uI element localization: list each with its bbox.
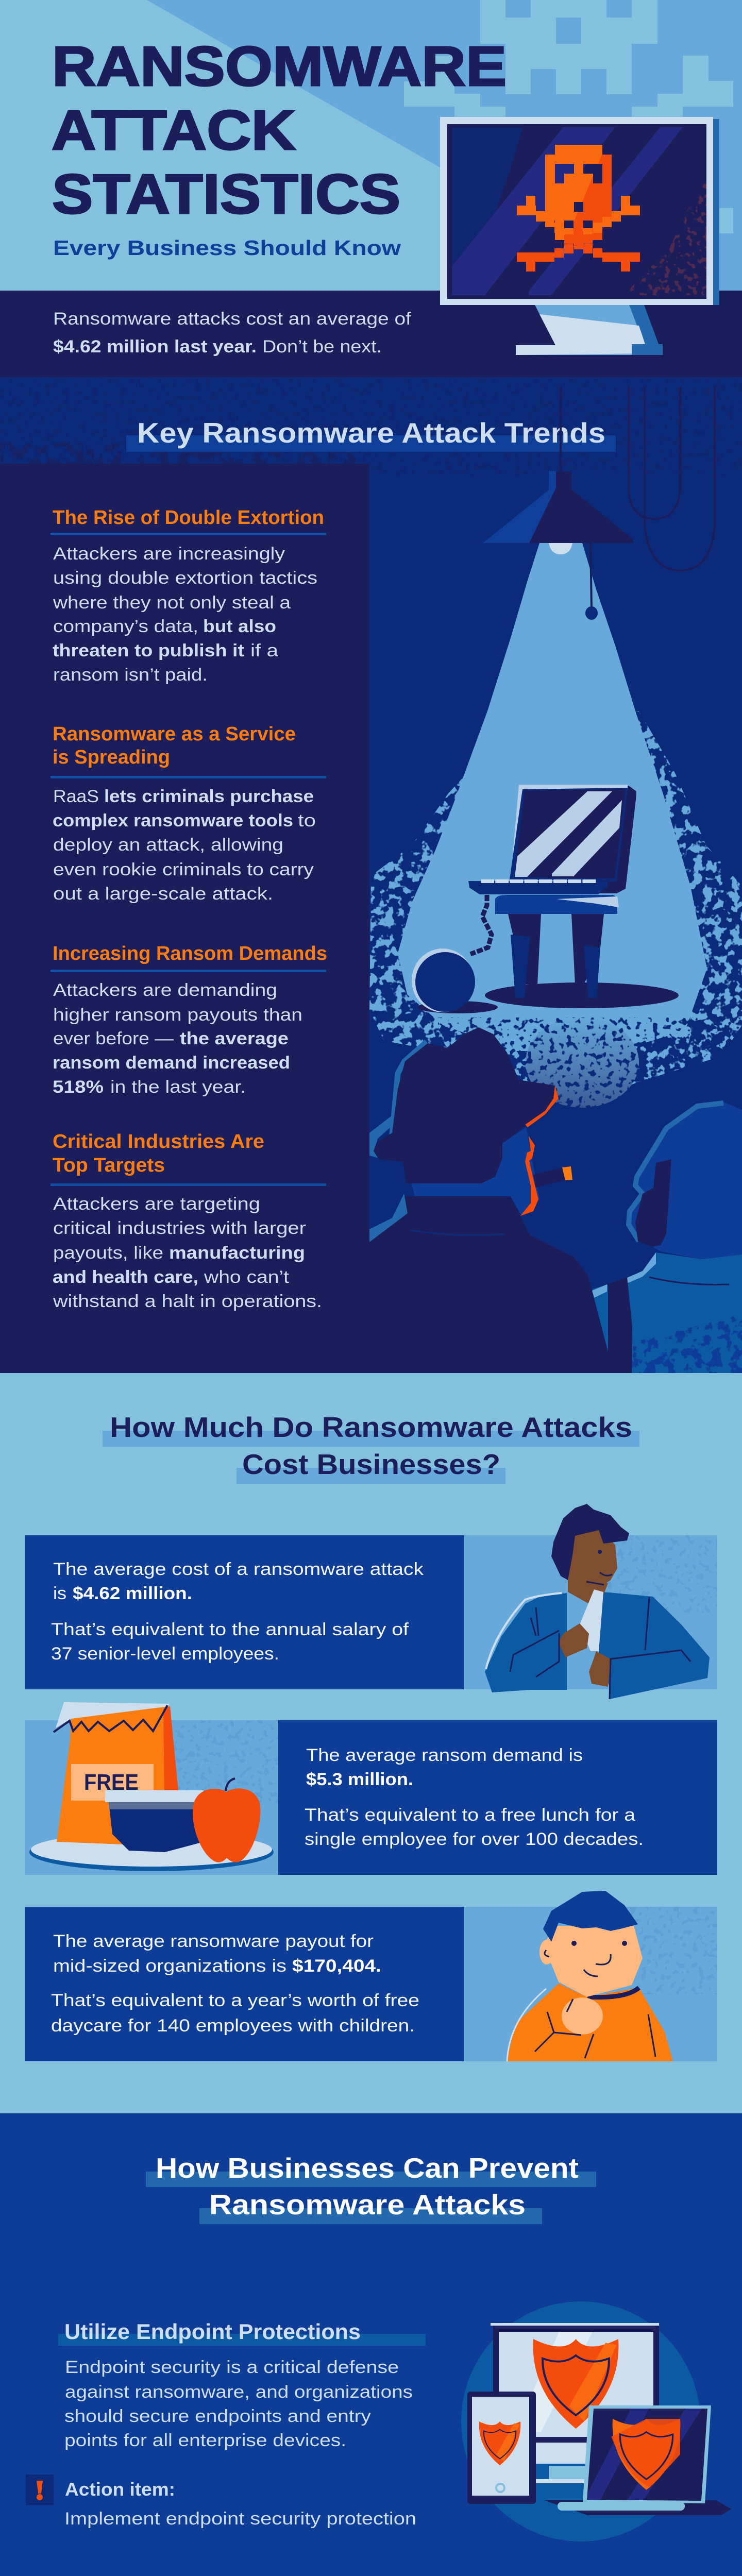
block: endpoint protections: Action item: bbox=[65, 2479, 175, 2500]
heading: prevention: How Businesses Can Prevent bbox=[156, 2152, 579, 2184]
title: STATISTICS bbox=[52, 163, 400, 226]
panel: how businesses can prevent attacks bbox=[0, 2113, 742, 2576]
heading: prevention bbox=[146, 2152, 596, 2224]
text block: ransomware as a service: out a large-scale attack. bbox=[53, 884, 273, 904]
text block: critical industries: withstand a halt in operations. bbox=[53, 1292, 322, 1311]
text block: rise of double extortion: where they not only steal a bbox=[53, 593, 291, 613]
block: endpoint protections: points for all enterprise devices. bbox=[64, 2431, 346, 2450]
text block: rise of double extortion bbox=[50, 507, 326, 685]
text block: critical industries: and health care, bbox=[53, 1267, 198, 1287]
text block: hero intro: Ransomware attacks cost an average of bbox=[53, 309, 412, 329]
block: endpoint protections: should secure endpoints and entry bbox=[64, 2406, 371, 2426]
text block: critical industries: who can’t bbox=[204, 1267, 290, 1287]
text block: ransomware as a service: even rookie criminals to carry bbox=[53, 860, 314, 879]
text block: critical industries: manufacturing bbox=[169, 1243, 305, 1263]
heading: how much do attacks cost: How Much Do Ransomware Attacks bbox=[110, 1411, 632, 1443]
text block: ransomware as a service: is Spreading bbox=[53, 747, 170, 768]
panel: hero header bbox=[0, 0, 742, 378]
text block: ransomware as a service: lets criminals purchase bbox=[104, 787, 314, 806]
text block: increasing ransom demands: 518% bbox=[53, 1077, 104, 1097]
block: endpoint protections: Endpoint security is a critical defense bbox=[65, 2358, 399, 2377]
text block: rise of double extortion: The Rise of Double Extortion bbox=[53, 507, 324, 529]
icon: background pixel skull bbox=[404, 0, 733, 233]
block: endpoint protections: Utilize Endpoint Protections bbox=[64, 2319, 361, 2344]
icon: phone shield bbox=[479, 2421, 520, 2465]
title: RANSOMWARE bbox=[52, 35, 507, 98]
panel: cost of ransomware attacks bbox=[0, 1373, 742, 2114]
text block: increasing ransom demands: ransom demand increased bbox=[53, 1053, 290, 1073]
card: average cost of attack: is bbox=[53, 1584, 66, 1603]
icon: free lunch bag, bowl and apple: FREE bbox=[84, 1770, 139, 1795]
illustration: shielded devices bbox=[461, 2301, 731, 2541]
text block: critical industries: Critical Industries Are bbox=[53, 1131, 264, 1153]
card: average cost of attack: $4.62 million. bbox=[73, 1584, 192, 1603]
icon: exclamation alert bbox=[26, 2475, 54, 2505]
card: average cost of attack bbox=[25, 1504, 717, 1699]
icon: smiling person in orange sweater bbox=[507, 1891, 673, 2061]
subtitle: Every Business Should Know bbox=[53, 236, 401, 260]
icon: man in a suit bbox=[485, 1504, 710, 1699]
heading: key trends: Key Ransomware Attack Trends bbox=[137, 417, 605, 449]
card: average payout for mid-sized organizations: $170,404. bbox=[292, 1956, 381, 1976]
icon: laptop shield bbox=[611, 2419, 680, 2490]
heading: how much do attacks cost: Cost Businesses? bbox=[242, 1448, 500, 1480]
text block: ransomware as a service bbox=[50, 723, 326, 904]
card: average payout for mid-sized organizations: daycare for 140 employees with children. bbox=[51, 2016, 415, 2036]
illustration: locked laptop on table with ball and chain bbox=[412, 785, 679, 1013]
text block: increasing ransom demands bbox=[50, 943, 327, 1097]
block: endpoint protections: against ransomware, and organizations bbox=[65, 2382, 413, 2402]
text block: increasing ransom demands: Increasing Ransom Demands bbox=[53, 943, 327, 964]
text block: ransomware as a service: Ransomware as a Service bbox=[53, 723, 296, 745]
text block: critical industries: Attackers are targeting bbox=[53, 1194, 260, 1214]
text block: rise of double extortion: if a bbox=[250, 641, 278, 660]
text block: increasing ransom demands: the average bbox=[180, 1029, 289, 1048]
card: average ransom demand: $5.3 million. bbox=[306, 1770, 413, 1789]
heading: how much do attacks cost bbox=[103, 1411, 639, 1484]
title: ATTACK bbox=[52, 99, 296, 162]
card: average ransom demand: single employee for over 100 decades. bbox=[305, 1829, 644, 1849]
text block: critical industries bbox=[50, 1131, 326, 1311]
card: average cost of attack: The average cost of a ransomware attack bbox=[53, 1560, 424, 1579]
icon: monitor shield bbox=[533, 2339, 618, 2429]
text block: hero intro: $4.62 million last year. bbox=[53, 337, 257, 357]
card: average payout for mid-sized organizations: The average ransomware payout for bbox=[53, 1931, 374, 1951]
card: average ransom demand: That’s equivalent to a free lunch for a bbox=[305, 1805, 635, 1825]
illustration: hanging lamp and light cone bbox=[369, 386, 742, 1103]
card: average payout for mid-sized organizations bbox=[25, 1891, 717, 2061]
text block: critical industries: payouts, like bbox=[53, 1243, 163, 1263]
card: average ransom demand bbox=[25, 1702, 717, 1875]
text block: rise of double extortion: using double extortion tactics bbox=[53, 568, 317, 588]
icon: free lunch bag, bowl and apple bbox=[29, 1702, 274, 1871]
text block: critical industries: critical industries with larger bbox=[53, 1218, 306, 1238]
card: average payout for mid-sized organizations: That’s equivalent to a year’s worth of free bbox=[51, 1991, 419, 2010]
text block: ransomware as a service: complex ransomware tools bbox=[53, 811, 293, 831]
block: endpoint protections: Implement endpoint security protection bbox=[64, 2509, 416, 2529]
text block: hero intro: Don’t be next. bbox=[262, 337, 382, 357]
text block: rise of double extortion: company’s data, bbox=[53, 617, 198, 636]
text block: rise of double extortion: but also bbox=[203, 617, 276, 636]
illustration: two hacker silhouettes bbox=[369, 1017, 742, 1374]
text block: ransomware as a service: to bbox=[298, 811, 316, 831]
card: average payout for mid-sized organizations: mid-sized organizations is bbox=[53, 1956, 286, 1976]
text block: rise of double extortion: Attackers are increasingly bbox=[53, 544, 285, 564]
panel: key ransomware attack trends bbox=[0, 377, 742, 1374]
text block: critical industries: Top Targets bbox=[53, 1155, 165, 1176]
text block: rise of double extortion: ransom isn’t paid. bbox=[53, 665, 208, 685]
text block: increasing ransom demands: in the last year. bbox=[110, 1077, 246, 1097]
block: endpoint protections bbox=[26, 2319, 426, 2529]
text block: increasing ransom demands: ever before — bbox=[53, 1029, 174, 1048]
title bbox=[52, 35, 507, 226]
text block: increasing ransom demands: Attackers are demanding bbox=[53, 980, 277, 1000]
text block: hero intro bbox=[53, 309, 412, 357]
icon: monitor with skull and crossbones bbox=[440, 117, 719, 355]
text block: rise of double extortion: threaten to publish it bbox=[53, 641, 244, 660]
text block: ransomware as a service: RaaS bbox=[53, 787, 99, 806]
text block: ransomware as a service: deploy an attack, allowing bbox=[53, 835, 283, 855]
card: average cost of attack: 37 senior-level employees. bbox=[51, 1644, 279, 1664]
card: average ransom demand: The average ransom demand is bbox=[306, 1745, 583, 1765]
heading: prevention: Ransomware Attacks bbox=[209, 2189, 526, 2221]
card: average cost of attack: That’s equivalent to the annual salary of bbox=[51, 1620, 409, 1639]
text block: increasing ransom demands: higher ransom payouts than bbox=[53, 1005, 302, 1025]
